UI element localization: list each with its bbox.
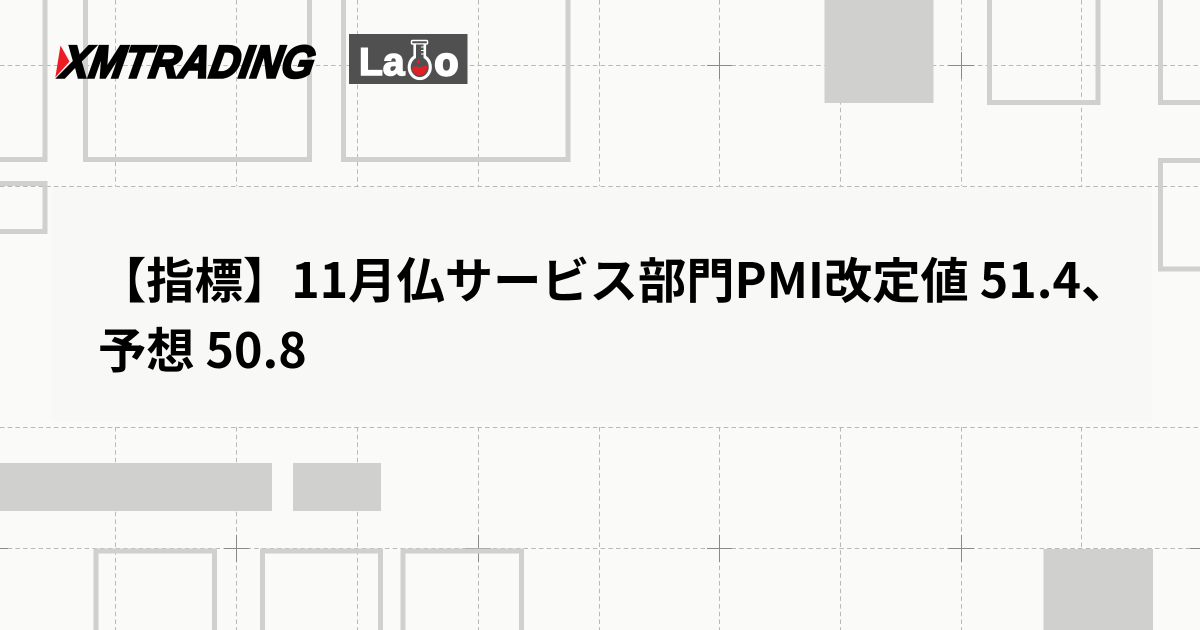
icon: red arrow — [55, 46, 70, 78]
filled block, top — [824, 0, 934, 103]
title panel — [52, 187, 1152, 422]
filled block, bottom right — [1044, 549, 1153, 630]
filled bar, lower left long — [0, 463, 272, 511]
title: 予想 50.8 — [98, 312, 307, 382]
icon: flask — [409, 40, 431, 79]
logo: Lab: o — [434, 41, 458, 84]
outlined squares, bottom row — [96, 551, 522, 630]
logo: Lab: La — [359, 41, 405, 84]
title — [98, 242, 1129, 382]
filled bar, lower left short — [293, 463, 381, 511]
logo: XMTRADING: XMTRADING — [56, 36, 319, 87]
title: 【指標】11月仏サービス部門PMI改定値 51.4、 — [98, 242, 1129, 312]
outlined squares, top row — [0, 0, 1200, 269]
logo: Lab — [349, 34, 468, 84]
